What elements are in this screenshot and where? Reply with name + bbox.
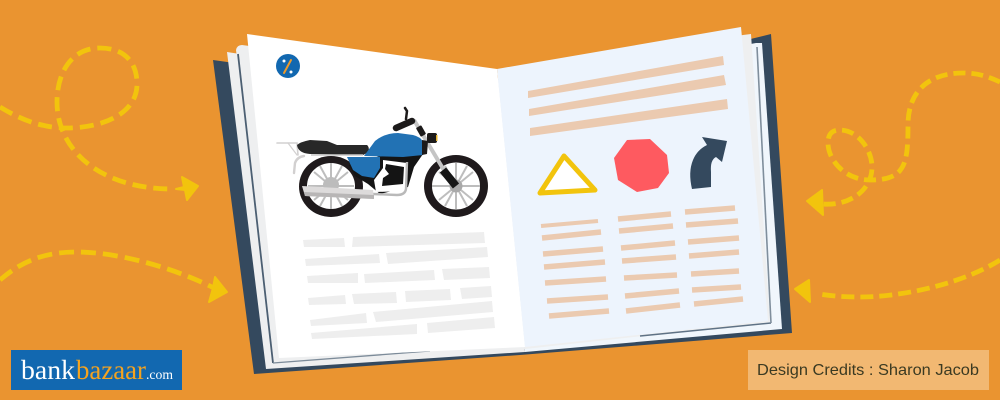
icon: warning triangle [540,156,595,193]
engine cover [374,160,407,192]
arrow: bottom left dashed arrow [0,252,227,302]
seat [297,140,369,155]
side panel [347,157,380,178]
seat trim [311,154,363,156]
right page [497,27,768,347]
column two lines [618,214,680,311]
back sheet right [500,43,782,352]
left page text blocks [303,232,495,339]
sheet edge line left [238,54,273,363]
arrow: top left looping dashed arrow [0,48,198,200]
engine block [382,164,404,186]
column one lines [541,221,609,316]
sheet edge line bottom left [273,351,430,363]
book cover [213,34,792,374]
middle sheet right [500,34,770,349]
handlebar and mirror [396,108,428,155]
column three lines [685,208,743,304]
middle sheet left [236,45,525,362]
icon: percent badge [276,54,300,78]
luggage rack [277,143,304,173]
logo: BankBazaar [11,350,182,390]
logo wordmark: bank [21,355,76,385]
arrow: bottom right dashed arrow [795,260,1000,302]
front fork [414,120,456,186]
icon: stop octagon [614,139,669,192]
logo wordmark: bazaar [76,355,146,385]
rear wheel [299,156,363,217]
back sheet left [227,52,525,369]
headlight [427,133,438,143]
front wheel [424,155,488,217]
engine and frame [349,154,423,194]
exhaust muffler [302,186,374,199]
right page heading stripes [528,56,728,136]
arrow: top right looping dashed arrow [807,73,1000,215]
motorcycle illustration [277,108,488,217]
sheet edge line right [757,47,771,323]
fuel tank [364,133,423,157]
exhaust header pipe [373,162,407,195]
icon: mandatory turn arrow [690,137,727,189]
right page column text lines [541,208,743,316]
sheet edge line bottom right [640,323,771,336]
logo wordmark: .com [146,368,173,383]
left page [247,34,525,358]
open book [213,27,792,374]
design credits box [748,350,989,390]
credits text: Design Credits : Sharon Jacob [757,362,979,379]
